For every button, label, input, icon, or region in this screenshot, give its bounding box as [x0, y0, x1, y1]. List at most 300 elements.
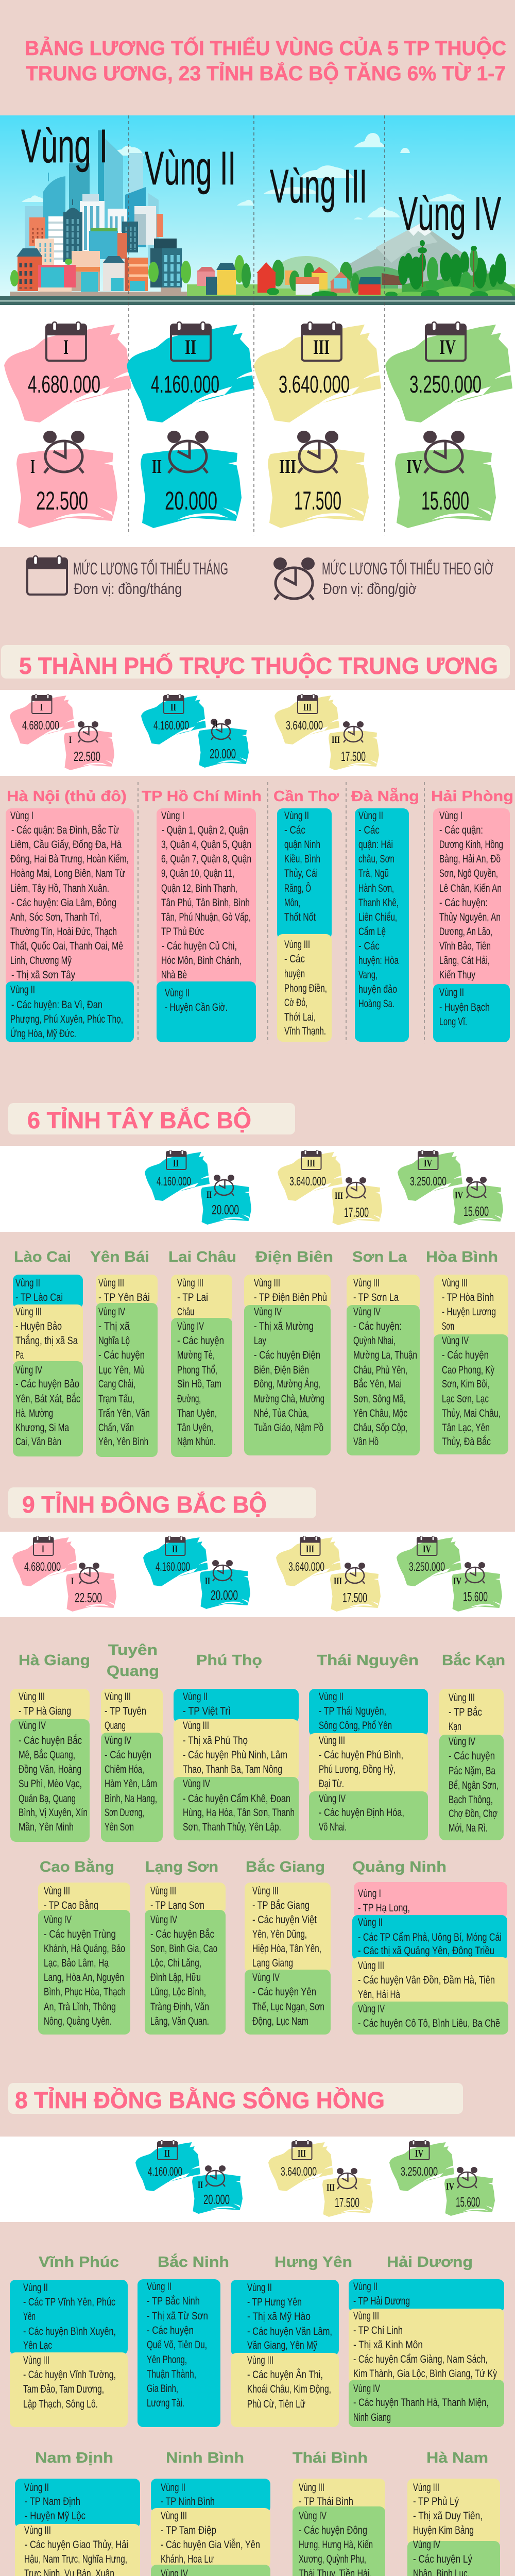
summary: region IV: 15.600	[464, 1204, 489, 1219]
summary: region II	[143, 1536, 250, 1609]
box: Đà Nẵng region II: Thanh Khê,	[358, 897, 399, 909]
box: Nam Định region II	[15, 2479, 140, 2528]
legend: hourly	[273, 557, 493, 600]
summary: region III: 3.640.000	[288, 1560, 324, 1574]
box: Lạng Sơn region IV: Tràng Định, Văn	[150, 2001, 209, 2013]
box: Cần Thơ region II: - Các	[284, 824, 305, 836]
summary: region II: II	[213, 719, 218, 730]
box: Lào Cai region III: Pa	[15, 1349, 24, 1361]
city name: Hải Phòng	[431, 788, 513, 805]
box: Hưng Yên region II: Văn Giang, Yên Mỹ	[247, 2340, 317, 2351]
box: Vĩnh Phúc region II: Yên	[23, 2311, 36, 2323]
box: Đà Nẵng region II: Hoàng Sa.	[358, 998, 394, 1010]
box: Bắc Kạn region IV: Pác Nặm, Ba	[449, 1765, 495, 1777]
box: Tuyên Quang region IV: Chiêm Hóa,	[105, 1764, 144, 1775]
province name: Yên Bái	[90, 1249, 149, 1265]
summary: region I	[10, 694, 114, 770]
box: Hòa Bình region IV: Sơn, Kim Bôi,	[442, 1378, 490, 1390]
box: Tuyên Quang region IV: Hàm Yên, Lâm	[105, 1778, 157, 1790]
box: Yên Bái region IV: Chấn, Văn	[98, 1422, 134, 1434]
box: Sơn La region IV: Châu, Sốp Cộp,	[353, 1422, 407, 1434]
province name: Điện Biên	[255, 1249, 333, 1265]
province name: Hải Dương	[387, 2254, 473, 2270]
summary: region IV: IV	[455, 1190, 463, 1201]
box: Điện Biên region IV: Tuần Giáo, Nậm Pồ	[254, 1422, 323, 1434]
province name: Nam Định	[35, 2450, 113, 2466]
box: Cần Thơ region III	[277, 934, 332, 1042]
province name: Lào Cai	[14, 1249, 71, 1265]
box: Điện Biên region IV: Mường Chà, Mường	[254, 1393, 324, 1405]
box: Hải Dương region III: - Thị xã Kinh Môn	[353, 2339, 423, 2351]
box: Hòa Bình region IV: Thủy, Đà Bắc	[442, 1436, 491, 1448]
box: Quảng Ninh region II	[352, 1915, 507, 1960]
city name: TP Hồ Chí Minh	[142, 788, 262, 805]
box: Lai Châu region III	[171, 1275, 232, 1321]
box: TP HCM region I: TP Thủ Đức	[161, 926, 204, 938]
box: Hưng Yên region II: - TP Hưng Yên	[247, 2296, 302, 2308]
box: Vĩnh Phúc region III: Tam Đảo, Tam Dương,	[23, 2383, 104, 2395]
illustration: city to countryside	[0, 115, 515, 305]
box: Hà Nội region I: Vùng I	[10, 810, 33, 822]
province name: Thái Bình	[293, 2450, 368, 2466]
panel: Bắc Kạn	[439, 1651, 505, 1840]
box: Bắc Kạn region III: Kạn	[449, 1721, 461, 1733]
box: Thái Nguyên region II: Sông Công, Phổ Yên	[319, 1720, 392, 1732]
box: Hưng Yên region II	[231, 2280, 339, 2355]
box: Hà Nội region II: Phượng, Phú Xuyên, Phúc Thọ,	[10, 1013, 123, 1025]
box: Phú Thọ region IV: Sơn, Thanh Thủy, Yên Lập.	[183, 1821, 281, 1833]
box: Tuyên Quang region IV: Sơn Dương,	[105, 1807, 144, 1819]
box: Lai Châu region IV: - Các huyện	[177, 1335, 224, 1347]
box: Hòa Bình region III: Sơn	[442, 1320, 454, 1332]
box: Ninh Bình region III: - Các huyện Gia Viễn, Yên	[161, 2539, 260, 2551]
houses and hills	[197, 223, 515, 295]
box: Lạng Sơn region IV: Sơn, Bình Gia, Cao	[150, 1943, 217, 1955]
box: Tuyên Quang region IV: Vùng IV	[105, 1735, 131, 1747]
box: Lạng Sơn region IV: Lũng, Lộc Bình,	[150, 1986, 206, 1998]
box: Sơn La region IV: Quỳnh Nhai,	[353, 1335, 396, 1347]
box: Hòa Bình region IV: Lạc Sơn, Lạc	[442, 1393, 489, 1405]
summary: region II	[141, 694, 249, 768]
box: Bắc Ninh region II: - Các huyện	[147, 2325, 194, 2336]
box: Ninh Bình region II: - TP Ninh Bình	[161, 2496, 215, 2507]
box: Cần Thơ region II: Thủy, Cái	[284, 868, 318, 879]
box: Quảng Ninh region III: Vùng III	[358, 1960, 384, 1972]
box: Vĩnh Phúc region III: - Các huyện Vĩnh Tường,	[23, 2369, 116, 2381]
box: Thái Bình region IV	[293, 2506, 385, 2576]
province name: Hà Giang	[19, 1652, 90, 1669]
box: TP HCM region I	[157, 808, 256, 986]
box: Hà Nội region I: Hoàng Mai, Long Biên, Nam Từ	[10, 868, 125, 879]
box: Hòa Bình region IV: - Các huyện	[442, 1349, 489, 1361]
box: Lạng Sơn region III	[145, 1883, 226, 1913]
box: Phú Thọ region II: - TP Việt Trì	[183, 1705, 231, 1717]
panel: hourly wage region II	[141, 431, 242, 528]
box: Cần Thơ region III: huyện	[284, 968, 305, 980]
panel: Lào Cai	[13, 1249, 83, 1456]
box: Lào Cai region II: - TP Lào Cai	[15, 1292, 63, 1303]
box: Lạng Sơn region IV: Vùng IV	[150, 1914, 177, 1926]
box: Hà Giang region III	[10, 1689, 90, 1722]
box: Hà Nội region I: - Các huyện: Gia Lâm, Đông	[11, 897, 116, 909]
box: Lào Cai region IV: Yên, Bát Xát, Bắc	[15, 1393, 80, 1405]
summary: region I: 4.680.000	[24, 1560, 61, 1574]
box: Điện Biên region IV: Vùng IV	[254, 1306, 282, 1318]
box: Hà Giang region IV: Su Phì, Mèo Vạc,	[19, 1778, 82, 1790]
box: Hà Giang region IV: Mê, Bắc Quang,	[19, 1749, 75, 1761]
box: Lai Châu region III: Châu	[177, 1306, 194, 1318]
box: Cao Bằng region IV: Vùng IV	[44, 1914, 72, 1926]
box: Thái Nguyên region III: Đại Từ.	[319, 1778, 344, 1790]
box: Tuyên Quang region III: Vùng III	[105, 1691, 131, 1703]
panel: Bắc Ninh	[138, 2253, 229, 2427]
panel: monthly wage region I	[4, 322, 133, 422]
box: Bắc Ninh region II: - Thị xã Từ Sơn	[147, 2310, 208, 2322]
box: Thái Bình region IV: Xương, Quỳnh Phụ,	[299, 2553, 366, 2565]
summary: region IV: IV	[424, 1158, 432, 1169]
panel: Hà Giang	[10, 1652, 90, 1842]
summary: region III: III	[332, 735, 340, 745]
panel: Lai Châu	[168, 1249, 236, 1457]
box: Hà Nội region I: Liêm, Tây Hồ, Thanh Xuân.	[10, 883, 109, 894]
box: Tuyên Quang region IV: Yên Sơn	[105, 1821, 134, 1833]
box: Cần Thơ region III: Vĩnh Thạnh.	[284, 1025, 326, 1037]
box: Phú Thọ region III: - Các huyện Phù Ninh, Lâm	[183, 1749, 287, 1761]
panel: hourly wage region III	[268, 431, 369, 528]
summary: region II: 4.160.000	[148, 2165, 182, 2179]
box: Đà Nẵng region II: Hành Sơn,	[358, 883, 394, 894]
box: Bắc Giang region IV	[245, 1970, 331, 2035]
box: Lào Cai region III: Vùng III	[15, 1306, 42, 1318]
box: Hà Nội region I: Linh, Chương Mỹ	[10, 955, 72, 967]
summary: region III: 17.500	[335, 2195, 359, 2210]
province name	[107, 1642, 159, 1680]
box: Nam Định region III	[15, 2524, 140, 2576]
box: Bắc Giang region III: Lạng Giang	[252, 1957, 293, 1969]
box: TP HCM region I: Quận 12, Bình Thạnh,	[161, 883, 237, 894]
box: Cần Thơ region II: Môn,	[284, 897, 300, 909]
box: Hưng Yên region II: - Thị xã Mỹ Hào	[247, 2311, 311, 2323]
summary: region II: II	[172, 1544, 178, 1555]
panel: hourly wage region I	[16, 431, 117, 528]
panel: hourly wage region III: III	[279, 456, 296, 478]
city name: Cần Thơ	[273, 788, 339, 805]
box: Hưng Yên region II: Vùng II	[247, 2282, 272, 2294]
box: Sơn La region III: Vùng III	[353, 1277, 380, 1289]
summary: region II: II	[164, 2148, 170, 2159]
box: Bắc Giang region IV: Động, Lục Nam	[252, 2015, 308, 2027]
box: Nam Định region II: - TP Nam Định	[25, 2496, 80, 2507]
box: Thái Bình region III: - TP Thái Bình	[299, 2496, 353, 2507]
box: Hòa Bình region IV: Cao Phong, Kỳ	[442, 1364, 494, 1376]
box: Hà Nam region IV: Vùng IV	[413, 2539, 440, 2551]
box: Hà Nam region IV	[407, 2539, 500, 2576]
box: Bắc Ninh region II: Lương Tài.	[147, 2397, 184, 2409]
box: Sơn La region IV: Sơn, Sông Mã,	[353, 1393, 406, 1405]
summary: region I: I	[71, 1576, 74, 1587]
panel: Vĩnh Phúc	[10, 2254, 128, 2427]
summary: region II: 4.160.000	[153, 719, 189, 733]
box: Hưng Yên region III: - Các huyện Ân Thi,	[247, 2369, 323, 2381]
summary: region II: 4.160.000	[157, 1175, 191, 1189]
box: TP HCM region I: - Quận 1, Quận 2, Quận	[162, 824, 248, 836]
box: Vĩnh Phúc region II: - Các TP Vĩnh Yên, Phúc	[23, 2296, 115, 2308]
box: Hà Nội region II: Ứng Hòa, Mỹ Đức.	[10, 1028, 76, 1040]
box: Yên Bái region IV: Nghĩa Lộ	[98, 1335, 130, 1347]
region labels: Vùng III	[270, 160, 367, 213]
box: Yên Bái region IV: - Thị xã	[98, 1320, 130, 1332]
box: Thái Nguyên region IV: - Các huyện Định Hóa,	[319, 1807, 404, 1819]
box: Phú Thọ region III: Thao, Thanh Ba, Tam Nông	[183, 1764, 282, 1775]
box: Phú Thọ region II	[174, 1689, 299, 1723]
panel: hourly wage region I: 22.500	[36, 486, 88, 515]
summary: region III: 3.640.000	[289, 1175, 326, 1189]
box: Ninh Bình region IV	[151, 2565, 270, 2576]
box: TP HCM region I: Tân Phú, Tân Bình, Bình	[161, 897, 250, 909]
box: Quảng Ninh region IV	[352, 2002, 508, 2035]
summary: region IV: 15.600	[456, 2194, 480, 2210]
box: Bắc Ninh region II: - TP Bắc Ninh	[147, 2295, 200, 2307]
box: Đà Nẵng region II	[355, 808, 409, 1042]
box: Sơn La region IV: Vùng IV	[353, 1306, 381, 1318]
box: Cần Thơ region II: Kiều, Bình	[284, 853, 320, 865]
panel: Tuyên Quang	[101, 1642, 163, 1842]
province name: Hà Nam	[426, 2450, 488, 2466]
box: Hà Nội region I: - Các quận: Ba Đình, Bắc Từ	[11, 824, 119, 836]
box: Hải Dương region II: - TP Hải Dương	[353, 2295, 410, 2307]
city layers	[10, 130, 515, 296]
province name: Quang	[107, 1663, 159, 1680]
box: Hà Giang region IV: Quản Bạ, Quang	[19, 1793, 76, 1805]
box: Lào Cai region IV: Hà, Mường	[15, 1408, 53, 1419]
region labels: Vùng I	[21, 120, 108, 173]
summary: region II: II	[198, 2180, 203, 2191]
box: Cao Bằng region IV: - Các huyện Trùng	[44, 1928, 116, 1940]
box: Tuyên Quang region IV	[101, 1733, 163, 1842]
box: Hải Phòng region II: Long Vĩ.	[439, 1016, 467, 1028]
legend: monthly: Đơn vị: đồng/tháng	[74, 581, 182, 598]
box: Lai Châu region IV: Nậm Nhùn.	[177, 1436, 216, 1448]
summary: region III: III	[303, 702, 312, 713]
panel: hourly wage region IV	[395, 431, 496, 528]
box: Bắc Kạn region IV	[439, 1735, 504, 1840]
box: TP HCM region I: Tân, Phú Nhuận, Gò Vấp,	[161, 911, 251, 923]
box: Hà Nội region I: Đông, Hai Bà Trưng, Hoàn Kiếm,	[10, 853, 129, 865]
dividers: cities	[138, 782, 424, 1043]
box: Cần Thơ region III: Vùng III	[284, 939, 310, 951]
province name: Cao Bằng	[40, 1858, 114, 1875]
panel: Cần Thơ	[273, 788, 339, 1042]
summary: region IV: 3.250.000	[409, 1560, 445, 1574]
box: Phú Thọ region III	[174, 1719, 299, 1780]
summary: region IV: IV	[423, 1544, 431, 1555]
box: Bắc Kạn region III: Vùng III	[449, 1692, 475, 1704]
box: Yên Bái region IV: Trạm Tấu,	[98, 1393, 134, 1405]
box: Yên Bái region III	[96, 1275, 158, 1306]
panel: monthly wage region I: 4.680.000	[28, 370, 100, 398]
box: Hà Giang region IV: Vùng IV	[19, 1720, 46, 1732]
box: Bắc Giang region III: Hiệp Hòa, Tân Yên,	[252, 1943, 321, 1955]
box: Hưng Yên region III	[231, 2353, 339, 2427]
box: Lào Cai region III	[13, 1304, 83, 1364]
box: Phú Thọ region IV: Vùng IV	[183, 1778, 210, 1790]
box: Vĩnh Phúc region II: - Các huyện Bình Xuyên,	[23, 2326, 116, 2337]
box: Hải Phòng region I: - Các quận:	[439, 824, 483, 836]
summary: region IV	[397, 1536, 502, 1612]
box: Hòa Bình region IV	[434, 1334, 508, 1454]
white panel: overview values	[0, 305, 515, 547]
panel: monthly wage region II	[127, 322, 255, 422]
panel: Lạng Sơn	[145, 1859, 226, 2035]
box: Yên Bái region IV: Vùng IV	[98, 1306, 125, 1318]
box: Sơn La region IV: Châu, Phù Yên,	[353, 1364, 407, 1376]
box: Thái Nguyên region III: Vùng III	[319, 1735, 345, 1747]
box: Hà Nội region I: Liêm, Cầu Giấy, Đống Đa, Hà	[10, 839, 122, 851]
box: Nam Định region III: Vùng III	[24, 2524, 51, 2536]
box: Lạng Sơn region IV: Lãng, Văn Quan.	[150, 2015, 209, 2027]
province name: Sơn La	[352, 1249, 407, 1265]
province name: Tuyên	[108, 1642, 158, 1658]
box: Hòa Bình region III: - Huyện Lương	[442, 1306, 496, 1318]
box: Bắc Ninh region II: Quế Võ, Tiên Du,	[147, 2339, 207, 2351]
box: Hải Dương region II	[349, 2279, 504, 2312]
box: Hòa Bình region III: Vùng III	[442, 1277, 468, 1289]
box: Hải Dương region III: - TP Chí Linh	[353, 2325, 403, 2336]
box: Hải Phòng region II	[433, 984, 510, 1042]
summary: region II: II	[207, 1190, 212, 1200]
box: Hà Nam region III: Vùng III	[413, 2482, 439, 2494]
box: Bắc Giang region IV: - Các huyện Yên	[252, 1986, 316, 1998]
province name: Bắc Kạn	[442, 1651, 505, 1669]
box: Phú Thọ region III: - Thị xã Phú Thọ	[183, 1735, 248, 1747]
box: Hòa Bình region III	[434, 1275, 508, 1337]
panel: Phú Thọ	[174, 1652, 299, 1840]
summary: region III: 3.640.000	[281, 2165, 317, 2179]
summary: region III	[276, 1536, 381, 1612]
box: Yên Bái region IV: Lục Yên, Mù	[98, 1364, 145, 1376]
panel: Hưng Yên	[231, 2254, 352, 2427]
box: Điện Biên region IV: Đông, Mường Ảng,	[254, 1378, 320, 1390]
province name: Bắc Ninh	[158, 2253, 229, 2270]
box: Quảng Ninh region II: Vùng II	[358, 1917, 383, 1928]
box: Ninh Bình region III: Khánh, Hoa Lư	[161, 2553, 214, 2565]
box: Đà Nẵng region II: Vang,	[358, 969, 377, 981]
summary: region III: III	[334, 1576, 342, 1587]
summary: region III: III	[298, 2148, 306, 2159]
box: Hà Giang region IV: Mần, Yên Minh	[19, 1821, 74, 1833]
panel: Hà Nội	[6, 788, 134, 1042]
title	[25, 36, 506, 85]
title: TRUNG ƯƠNG, 23 TỈNH BẮC BỘ TĂNG 6% TỪ 1-7	[26, 61, 506, 85]
summary: region IV	[398, 1150, 503, 1225]
panel: hourly wage region I: I	[30, 456, 35, 478]
box: Quảng Ninh region I: Vùng I	[358, 1888, 381, 1900]
box: Hà Nội region II: Vùng II	[10, 984, 35, 996]
box: Đà Nẵng region II: Trà, Ngũ	[358, 868, 389, 879]
box: Cao Bằng region III	[38, 1883, 130, 1913]
province name: Lạng Sơn	[145, 1859, 218, 1875]
box: Hà Nội region I	[6, 808, 134, 986]
panel: Đà Nẵng	[351, 787, 419, 1042]
panel: hourly wage region II: 20.000	[165, 486, 217, 515]
box: Bắc Kạn region III: - TP Bắc	[449, 1706, 482, 1718]
box: Vĩnh Phúc region II: Vùng II	[23, 2282, 48, 2294]
box: Yên Bái region IV: Yên, Yên Bình	[98, 1436, 148, 1448]
box: Lai Châu region IV: Đường,	[177, 1393, 201, 1405]
box: Vĩnh Phúc region III	[10, 2352, 128, 2427]
panel: monthly wage region IV	[385, 322, 514, 422]
box: Thái Nguyên region IV: Võ Nhai.	[319, 1821, 347, 1833]
box: Điện Biên region III: Vùng III	[254, 1277, 280, 1289]
box: Ninh Bình region III: - TP Tam Điệp	[161, 2524, 216, 2536]
box: Cao Bằng region IV: Nông, Quảng Uyên.	[44, 2015, 112, 2027]
box: Đà Nẵng region II: Vùng II	[358, 810, 383, 822]
box: Hà Nội region II	[6, 981, 134, 1042]
box: Bắc Giang region IV: Vùng IV	[252, 1972, 280, 1984]
panel: monthly wage region II: 4.160.000	[151, 370, 219, 398]
box: Cao Bằng region IV: Khánh, Hà Quảng, Bảo	[44, 1943, 125, 1955]
box: Bắc Ninh region II: Yên Phong,	[147, 2354, 187, 2366]
heading: 8 Red River Delta provinces: 8 TỈNH ĐỒNG BẰNG SÔNG HỒNG	[15, 2087, 385, 2113]
summary: region IV: IV	[453, 1576, 461, 1587]
box: Hải Phòng region I: Lãng, Cát Hải,	[439, 955, 490, 967]
box: Bắc Kạn region IV: - Các huyện	[449, 1750, 495, 1762]
province name: Hòa Bình	[426, 1249, 498, 1265]
box: Đà Nẵng region II: Cẩm Lệ	[358, 926, 386, 938]
region labels: Vùng II	[145, 142, 236, 195]
box: Điện Biên region III: - TP Điện Biên Phủ	[254, 1292, 327, 1303]
box: Cao Bằng region IV	[38, 1910, 130, 2035]
summary: region III: 17.500	[341, 749, 366, 764]
box: Lạng Sơn region IV: Đình Lập, Hữu	[150, 1972, 201, 1984]
box: TP HCM region I: 3, Quận 4, Quận 5, Quận	[161, 839, 251, 851]
box: Lào Cai region IV: Vùng IV	[15, 1364, 42, 1376]
province name: Thái Nguyên	[317, 1652, 419, 1669]
heading: 6 northwest provinces	[8, 1103, 295, 1134]
box: Đà Nẵng region II: - Các	[358, 940, 380, 952]
box: Bắc Kạn region IV: Mới, Na Rì.	[449, 1822, 488, 1834]
box: TP HCM region I: 9, Quận 10, Quận 11,	[161, 868, 234, 879]
panel: Sơn La	[347, 1249, 420, 1455]
box: Phú Thọ region II: Vùng II	[183, 1691, 208, 1703]
box: Hà Nội region I: Thất, Quốc Oai, Thanh Oai, Mê	[10, 940, 123, 952]
box: Yên Bái region IV: Trấn Yên, Văn	[98, 1408, 150, 1419]
box: Sơn La region IV: Yên Châu, Mộc	[353, 1408, 407, 1419]
summary: region II: II	[173, 1158, 179, 1169]
box: Quảng Ninh region III: Yên, Hải Hà	[358, 1989, 400, 2001]
box: Quảng Ninh region IV: Vùng IV	[358, 2003, 385, 2015]
box: Ninh Bình region III	[151, 2508, 270, 2568]
panel: monthly wage region III: 3.640.000	[279, 370, 350, 398]
box: Sơn La region III: - TP Sơn La	[353, 1292, 399, 1303]
box: TP HCM region I: 6, Quận 7, Quận 8, Quận	[161, 853, 251, 865]
summary: region IV	[389, 2140, 495, 2216]
box: Hà Nam region IV: - Các huyện Lý	[413, 2553, 472, 2565]
box: Cao Bằng region IV: Bình, Phục Hòa, Thạch	[44, 1986, 126, 1998]
box: Thái Nguyên region IV: Vùng IV	[319, 1793, 346, 1805]
box: Lai Châu region IV: Than Uyên,	[177, 1408, 217, 1419]
box: Hải Dương region III: Vùng III	[353, 2310, 379, 2322]
city name: Đà Nẵng	[351, 787, 419, 805]
summary: region III: 17.500	[342, 1590, 367, 1605]
box: Nam Định region II: - Huyện Mỹ Lộc	[25, 2510, 85, 2522]
box: Bắc Ninh region II: Vùng II	[147, 2281, 171, 2293]
box: Lào Cai region IV: - Các huyện Bảo	[15, 1378, 79, 1390]
box: Thái Nguyên region II: Vùng II	[319, 1691, 344, 1703]
box: Cần Thơ region II: Thốt Nốt	[284, 911, 316, 923]
box: Sơn La region IV: Bắc Yên, Mai	[353, 1378, 402, 1390]
panel: Thái Nguyên	[309, 1652, 428, 1840]
